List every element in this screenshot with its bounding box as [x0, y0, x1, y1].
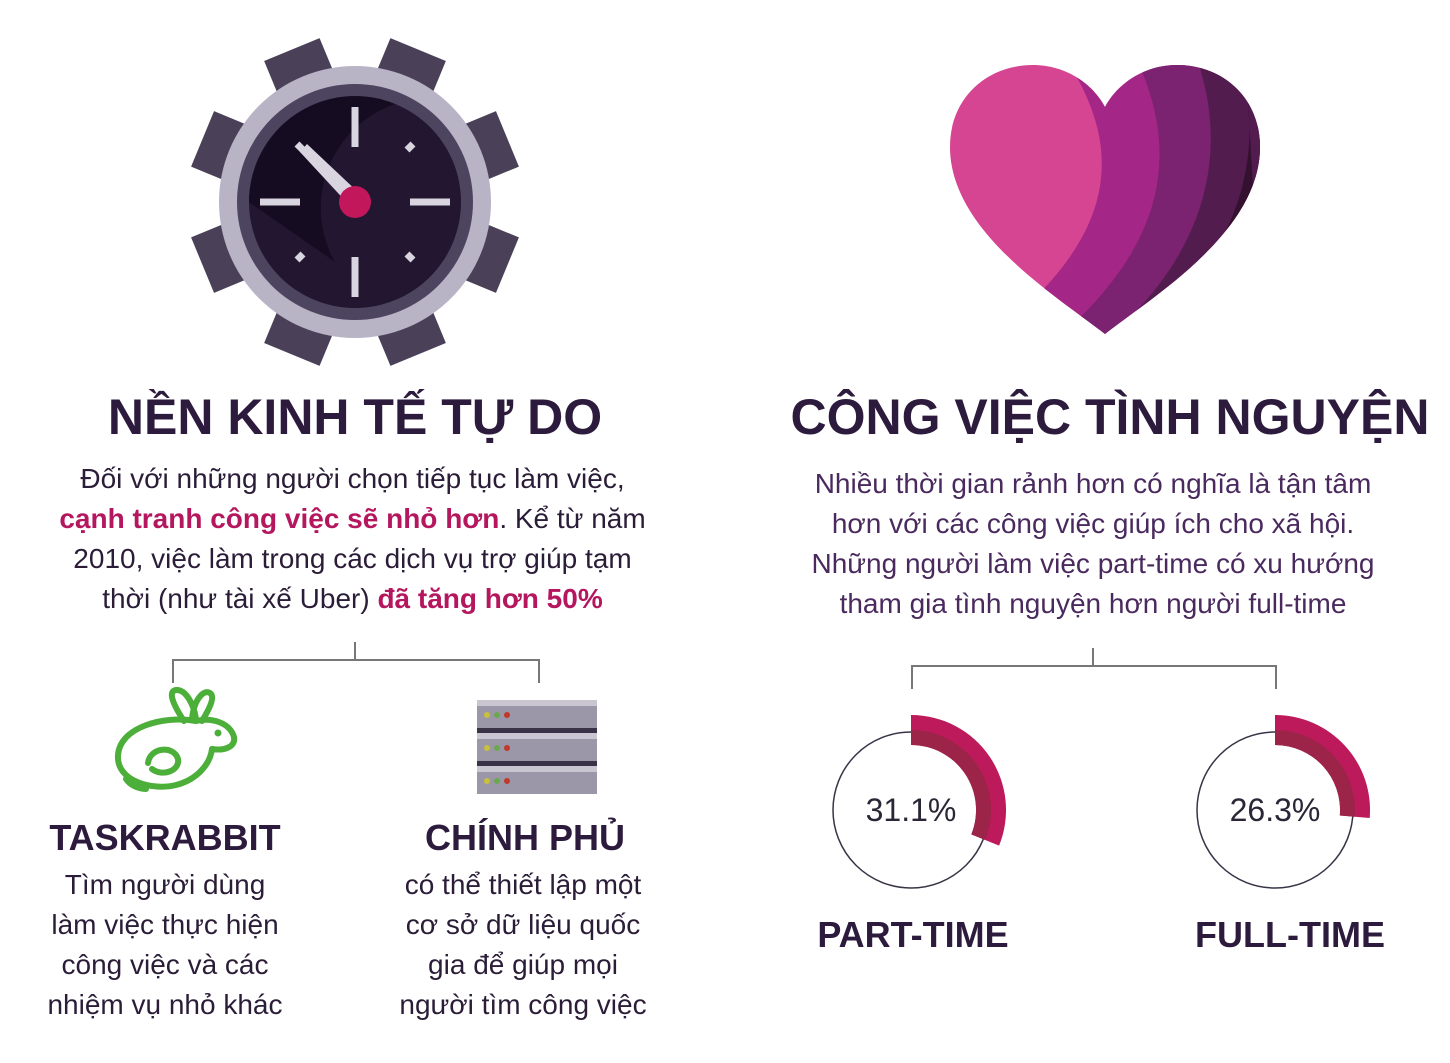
text: taskrabbit: Tìm người dùng — [65, 869, 265, 900]
text: taskrabbit: nhiệm vụ nhỏ khác — [47, 989, 283, 1020]
text: chinh phu: người tìm công việc — [399, 989, 647, 1020]
text: right paragraph: Nhiều thời gian rảnh hơn có nghĩa là tận tâm — [815, 468, 1371, 499]
icon: rabbit — [114, 687, 238, 792]
chart: part-time donut — [832, 715, 1006, 889]
text: chinh phu: cơ sở dữ liệu quốc — [406, 909, 640, 940]
heading: chinh phu: CHÍNH PHỦ — [425, 817, 625, 858]
text: taskrabbit — [47, 869, 283, 1020]
text: left paragraph: 2010, việc làm trong các dịch vụ trợ giúp tạm — [73, 543, 632, 574]
title: left: NỀN KINH TẾ TỰ DO — [108, 389, 602, 445]
title: right: CÔNG VIỆC TÌNH NGUYỆN — [791, 389, 1429, 445]
connector: left bracket — [172, 642, 540, 683]
chart: part-time donut: 31.1% — [866, 792, 956, 828]
icon: heart — [950, 65, 1260, 334]
chart: full-time donut — [1196, 715, 1370, 889]
text: right paragraph: hơn với các công việc giúp ích cho xã hội. — [832, 508, 1354, 539]
text: right paragraph — [812, 468, 1374, 619]
icon: clock gear — [191, 38, 519, 366]
label: part-time: PART-TIME — [817, 914, 1009, 955]
chart: full-time donut: 26.3% — [1230, 792, 1320, 828]
text: right paragraph: Những người làm việc part-time có xu hướng — [812, 548, 1374, 579]
text: left paragraph: cạnh tranh công việc sẽ nhỏ hơn. Kể từ năm — [59, 503, 646, 534]
icon: server — [477, 700, 597, 794]
heading: taskrabbit: TASKRABBIT — [49, 817, 281, 858]
text: chinh phu: có thể thiết lập một — [405, 869, 641, 900]
text: left paragraph — [59, 463, 646, 614]
text: left paragraph: thời (như tài xế Uber) đã tăng hơn 50% — [102, 583, 603, 614]
label: full-time: FULL-TIME — [1195, 914, 1385, 955]
connector: right bracket — [911, 648, 1277, 689]
text: chinh phu: gia để giúp mọi — [428, 949, 618, 980]
text: right paragraph: tham gia tình nguyện hơn người full-time — [840, 588, 1346, 619]
text: chinh phu — [399, 869, 647, 1020]
text: left paragraph: Đối với những người chọn tiếp tục làm việc, — [80, 463, 625, 494]
text: taskrabbit: công việc và các — [62, 949, 268, 980]
text: taskrabbit: làm việc thực hiện — [51, 909, 279, 940]
